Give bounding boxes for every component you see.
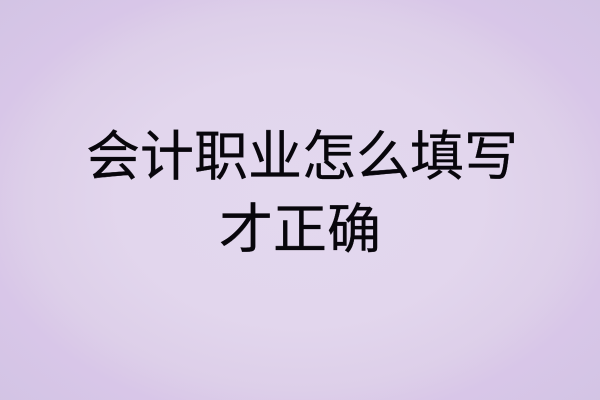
title: 才正确 bbox=[219, 200, 381, 260]
title bbox=[86, 127, 518, 260]
title: 会计职业怎么填写 bbox=[86, 127, 518, 187]
